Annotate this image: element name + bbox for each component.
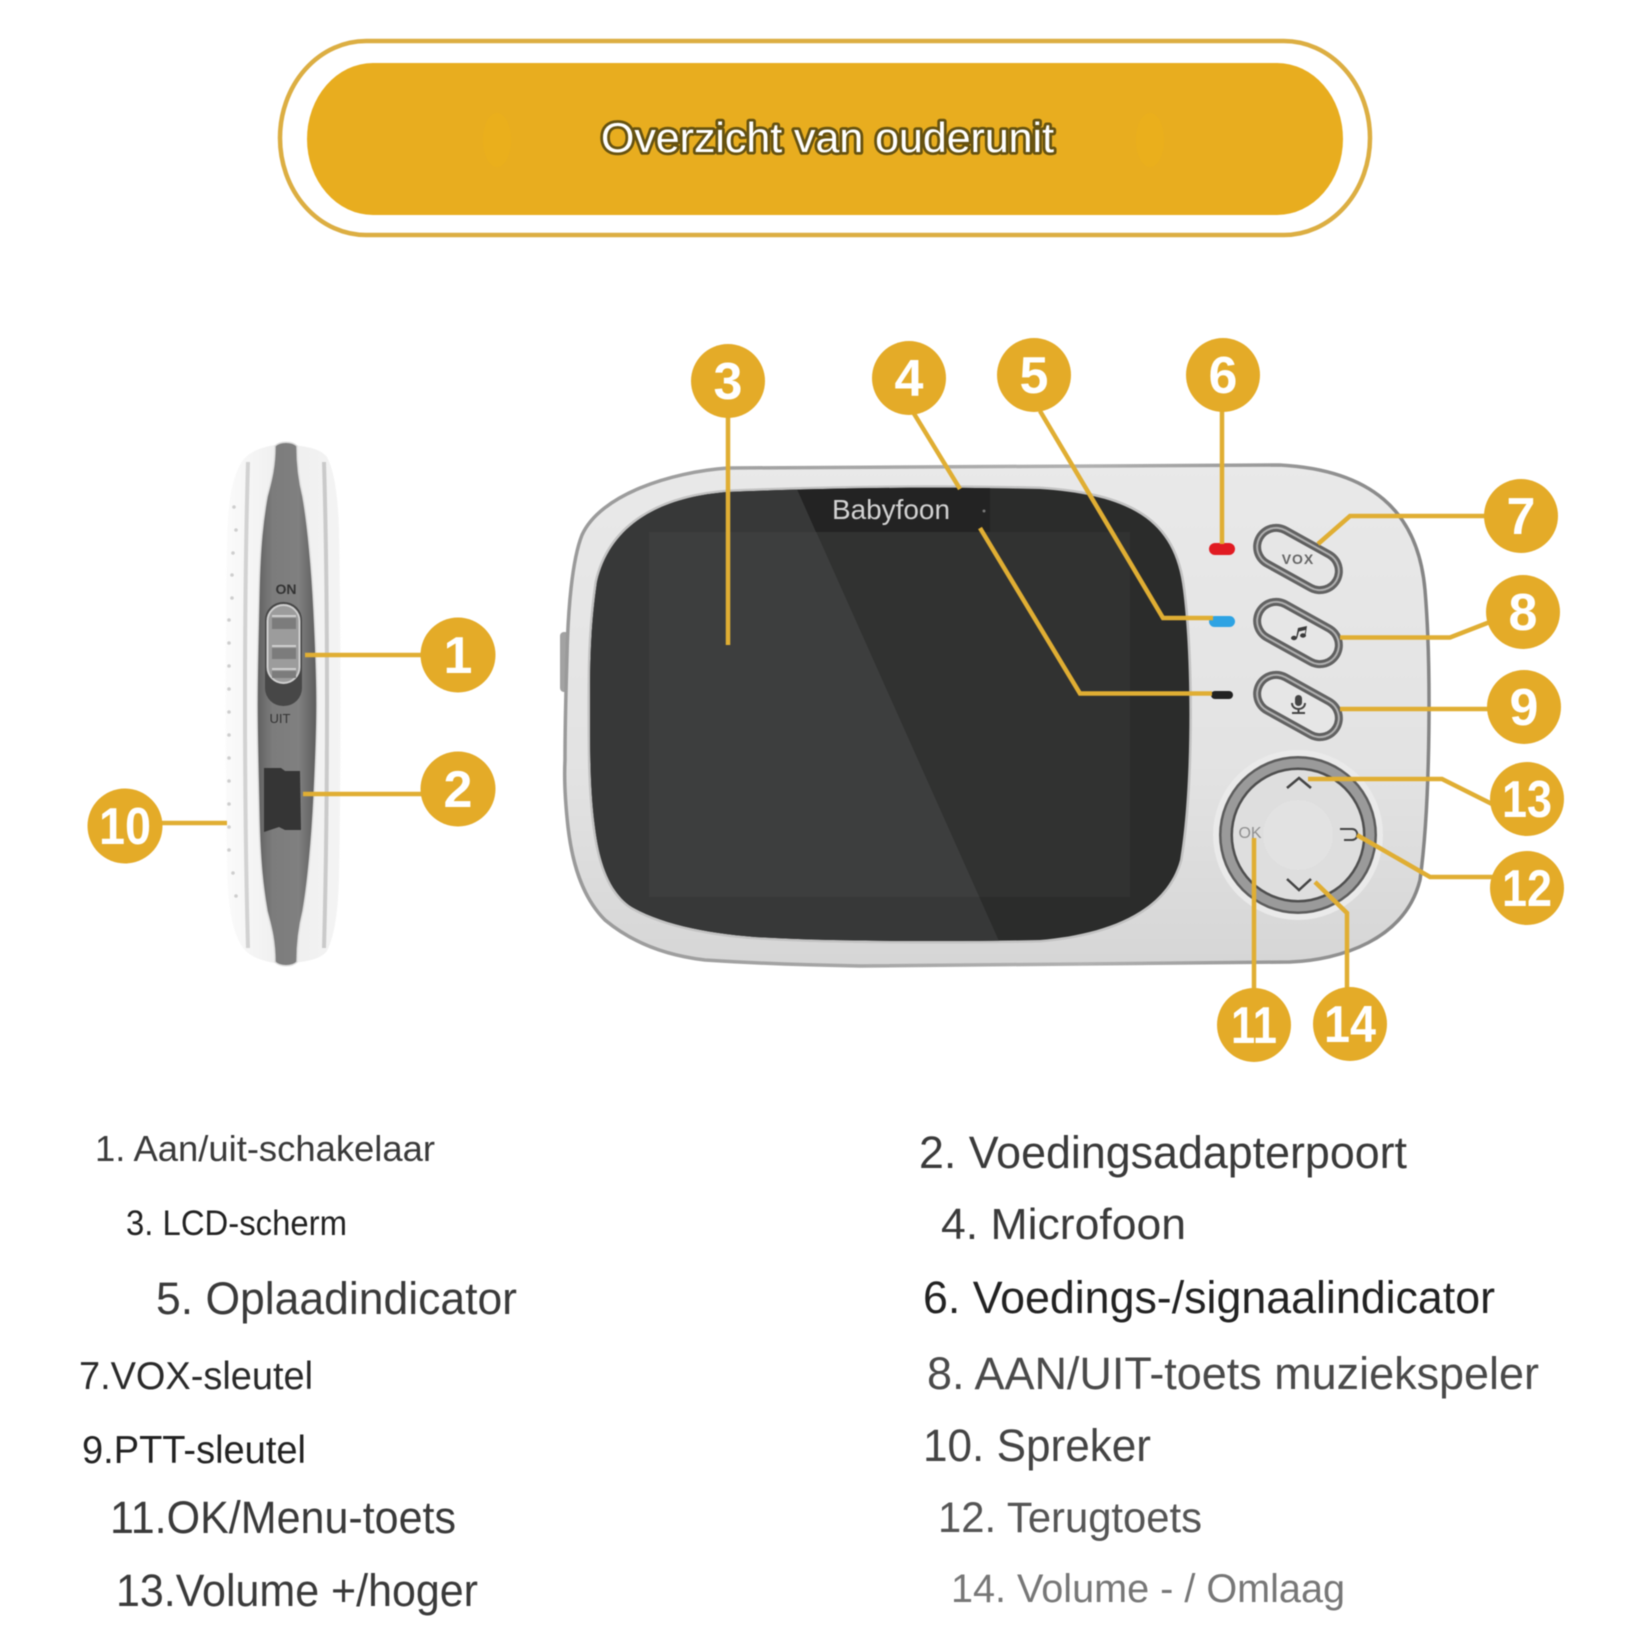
callout 11: 11 bbox=[1231, 997, 1277, 1055]
faint glow marks bbox=[483, 113, 1164, 167]
microphone slot bbox=[1211, 691, 1233, 699]
callout 8: 8 bbox=[1509, 584, 1537, 642]
callout 10 bbox=[88, 788, 162, 864]
callout 6: 6 bbox=[1209, 347, 1237, 405]
icon: microphone bbox=[1292, 695, 1305, 713]
indicator blue bbox=[1209, 616, 1235, 627]
legend item 12: 12. Terugtoets bbox=[938, 1494, 1202, 1542]
callout 14: 14 bbox=[1324, 996, 1376, 1054]
label ON: ON bbox=[276, 581, 296, 597]
navigation pad bbox=[1213, 750, 1383, 920]
LCD screen bbox=[580, 480, 1200, 950]
front view of parent unit bbox=[560, 465, 1429, 966]
callout 2: 2 bbox=[444, 761, 472, 819]
connector lines bbox=[160, 405, 1500, 995]
legend item 14: 14. Volume - / Omlaag bbox=[951, 1567, 1345, 1611]
button VOX: VOX bbox=[1282, 551, 1314, 567]
callout 11 bbox=[1217, 988, 1291, 1062]
callout 5 bbox=[997, 338, 1071, 412]
speaker holes bbox=[227, 505, 238, 898]
power switch bbox=[265, 602, 302, 706]
icon: music note bbox=[1291, 626, 1307, 640]
callout 14 bbox=[1313, 987, 1387, 1061]
screen bezel highlight bbox=[590, 488, 1189, 941]
legend item 6: 6. Voedings-/signaalindicator bbox=[923, 1272, 1495, 1323]
callout 9: 9 bbox=[1510, 679, 1538, 737]
brand text: Babyfoon bbox=[832, 494, 950, 525]
callout 6 bbox=[1186, 338, 1260, 412]
label UIT: UIT bbox=[270, 711, 291, 726]
callout 1 bbox=[420, 618, 496, 692]
power adapter port bbox=[264, 768, 301, 832]
callout 8 bbox=[1486, 575, 1560, 649]
legend left column bbox=[79, 1128, 517, 1616]
callout 10: 10 bbox=[99, 798, 151, 856]
button music bbox=[1245, 590, 1351, 676]
device body bbox=[565, 465, 1429, 966]
legend item 9: 9.PTT-sleutel bbox=[82, 1429, 306, 1472]
callout 4 bbox=[872, 341, 946, 415]
back arrow bbox=[1340, 829, 1357, 840]
legend item 13: 13.Volume +/hoger bbox=[116, 1565, 478, 1616]
grey centre strip bbox=[257, 442, 317, 966]
microphone dot bbox=[982, 510, 986, 512]
callout 2 bbox=[420, 752, 496, 826]
callout 13 bbox=[1490, 762, 1564, 836]
legend item 1: 1. Aan/uit-schakelaar bbox=[95, 1128, 435, 1169]
callout 7: 7 bbox=[1507, 488, 1535, 546]
legend item 4: 4. Microfoon bbox=[941, 1200, 1186, 1249]
up arrow bbox=[1287, 778, 1311, 788]
indicator red bbox=[1209, 543, 1235, 555]
callout 5: 5 bbox=[1020, 347, 1048, 405]
banner outer outline bbox=[280, 41, 1370, 235]
button talk bbox=[1245, 663, 1351, 749]
legend item 7: 7.VOX-sleutel bbox=[79, 1355, 313, 1398]
banner inner pill bbox=[307, 63, 1343, 215]
callout 7 bbox=[1484, 479, 1558, 553]
OK label: OK bbox=[1238, 825, 1262, 842]
callout 4: 4 bbox=[895, 350, 924, 408]
button VOX bbox=[1245, 516, 1351, 602]
title banner bbox=[280, 41, 1370, 235]
legend right column bbox=[919, 1127, 1539, 1611]
legend item 3: 3. LCD-scherm bbox=[126, 1204, 347, 1243]
callout 3: 3 bbox=[714, 353, 742, 411]
callout 9 bbox=[1487, 670, 1561, 744]
legend item 10: 10. Spreker bbox=[923, 1420, 1151, 1471]
legend item 11: 11.OK/Menu-toets bbox=[110, 1492, 456, 1543]
title text: Overzicht van ouderunit bbox=[601, 114, 1054, 161]
callout 12: 12 bbox=[1502, 860, 1552, 918]
legend item 5: 5. Oplaadindicator bbox=[156, 1273, 517, 1324]
callout 1: 1 bbox=[444, 627, 472, 685]
callout 12 bbox=[1490, 851, 1564, 925]
callout 13: 13 bbox=[1502, 771, 1552, 829]
callout 3 bbox=[691, 344, 765, 418]
side view of parent unit bbox=[226, 442, 340, 966]
down arrow bbox=[1287, 879, 1311, 890]
legend item 8: 8. AAN/UIT-toets muziekspeler bbox=[927, 1348, 1539, 1399]
side body bbox=[226, 444, 340, 964]
legend item 2: 2. Voedingsadapterpoort bbox=[919, 1127, 1407, 1178]
side buttons bump bbox=[560, 632, 569, 692]
